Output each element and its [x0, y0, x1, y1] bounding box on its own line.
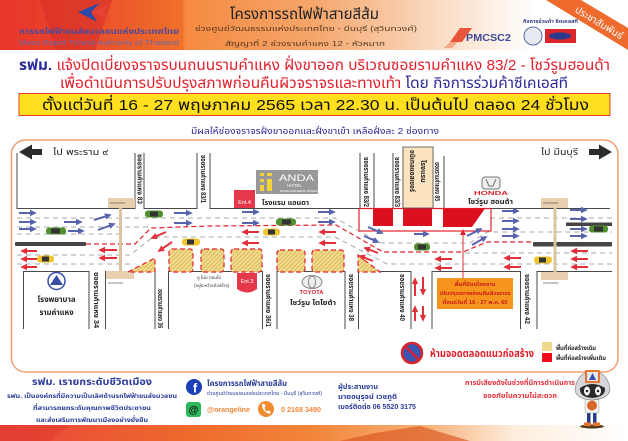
entrance 4: [234, 190, 255, 208]
soi labels south: ซอยรามคำแหง 36/1: [264, 274, 272, 327]
project title: [195, 6, 417, 48]
ANDA hotel logo: [256, 170, 322, 194]
traffic arrows inbound: [22, 232, 588, 268]
hospital: โรงพยาบาล: [38, 295, 76, 304]
callout: closure area: [437, 229, 513, 309]
soi labels south: ซอยรามคำแหง 38: [347, 274, 355, 321]
legend: [542, 342, 606, 362]
soi labels north: ซอยรามคำแหง 83: [136, 154, 144, 204]
ribbon: [546, 0, 628, 50]
MRTA slogan: ที่สามารถยกระดับคุณภาพชีวิตประชาชน: [33, 403, 151, 413]
coordinator: นายอนุรุจน์ เวชภูติ: [338, 393, 397, 402]
MRTA slogan: รฟม. เรายกระดับชีวิตเมือง: [32, 376, 152, 388]
side street arrows: [415, 277, 423, 321]
condo label: ยู โน่ย คอนโด: [197, 274, 221, 281]
coordinator: เบอร์ติดต่อ 06 5520 3175: [338, 403, 416, 411]
building: Ramkhamhaeng lot: [403, 147, 433, 208]
facebook page text: โครงการรถไฟฟ้าสายสีส้ม: [207, 378, 287, 388]
soi labels south: ซอยรามคำแหง 42: [523, 274, 531, 324]
footbridge west: [106, 198, 135, 285]
soi labels south: ซอยรามคำแหง 34: [92, 272, 100, 328]
phone number: 0 2168 3490: [281, 405, 321, 414]
ANDA hotel logo: ANDA: [279, 173, 315, 184]
building: Ramkhamhaeng lot: โรงแรม: [419, 160, 427, 183]
project title: ช่วงศูนย์วัฒนธรรมแห่งประเทศไทย - มีนบุรี (สุวินทวงศ์): [195, 24, 417, 34]
hospital: [38, 272, 76, 317]
PMCSC2 logo: PMCSC2: [466, 33, 511, 44]
ANDA hotel logo: RAMKHAMHAENG BANGKOK: [280, 189, 322, 193]
MRTA name: [19, 25, 179, 47]
joint venture logos: กิจการร่วมค้า ซิดเคลสที: [523, 17, 578, 25]
soi labels south: ซอยรามคำแหง 40: [398, 274, 406, 321]
Honda showroom: [468, 177, 513, 206]
MRTA slogan: [7, 376, 177, 424]
legend: พื้นที่ก่อสร้างเพิ่มเติม: [556, 353, 606, 362]
date banner: [19, 94, 610, 116]
coordinator: [338, 383, 416, 411]
MRTA slogan: รฟม. เป็นองค์กรที่มีความเป็นเลิศด้านรถไฟฟ้าขนส่งมวลชน: [7, 391, 177, 400]
icon: no parking: [402, 343, 422, 363]
direction: to Min Buri: ไป มีนบุรี: [540, 147, 579, 157]
apology note: ขออภัยในความไม่สะดวก: [483, 392, 557, 400]
soi labels south: ซอยรามคำแหง 36: [156, 289, 164, 328]
no parking text: ห้ามจอดตลอดแนวก่อสร้าง: [430, 347, 534, 360]
soi labels south: [92, 272, 531, 328]
footbridge west: สะพานลอย: [108, 281, 123, 285]
footbridge east: สะพานลอย: [543, 281, 558, 285]
north side blocks: [17, 147, 610, 208]
lane dashes: [17, 218, 612, 264]
announcement headline: [19, 54, 610, 92]
Toyota showroom: โชว์รูม โตโยต้า: [290, 299, 336, 307]
project title: สัญญาที่ 2 ช่วงรามคำแหง 12 - หัวหมาก: [225, 38, 385, 48]
soi labels north: ซอยรามคำแหง 83/3: [393, 157, 401, 207]
cars: [37, 210, 608, 264]
joint venture logos: [523, 17, 578, 45]
icon: phone: [258, 401, 274, 417]
MRTA name: การรถไฟฟ้าขนส่งมวลชนแห่งประเทศไทย: [19, 25, 179, 36]
project title: โครงการรถไฟฟ้าสายสีส้ม: [230, 6, 379, 23]
ribbon: ประชาสัมพันธ์: [573, 4, 625, 42]
condo label: (อยู่ระหว่างก่อสร้าง): [194, 282, 230, 289]
direction: to Rama 9: [19, 144, 109, 160]
south side blocks: [24, 272, 612, 329]
callout: closure area: ปรับปรุงสภาพก่อนคืนผิวจราจร: [440, 289, 511, 297]
Toyota showroom: TOYOTA: [300, 290, 324, 296]
callout: closure area: ตั้งแต่วันที่ 16 - 27 พ.ค. 65: [442, 298, 508, 306]
entrance 4: Ent.4: [238, 200, 251, 206]
direction: to Min Buri: [540, 144, 612, 160]
hotel label: โรงแรม แอนดา: [262, 199, 309, 207]
PMCSC2 logo: [444, 28, 511, 48]
MRTA logo: [78, 3, 110, 22]
soi labels north: ซอยรามคำแหง 83/2: [362, 157, 370, 207]
footbridge west: สะพานลอย: [110, 201, 125, 205]
panel: traffic map: [12, 140, 618, 372]
soi labels north: [136, 154, 441, 207]
hospital: รามคำแหง: [40, 308, 74, 317]
header band: [0, 0, 628, 50]
existing construction zones: [128, 249, 380, 272]
apology note: [465, 377, 575, 400]
MRTA slogan: และส่งเสริมการพัฒนาเมืองอย่างยั่งยืน: [36, 415, 148, 424]
traffic arrows outbound: [19, 210, 586, 245]
condo label: [194, 274, 230, 289]
icon: line: [186, 402, 201, 417]
median construction line: [15, 222, 612, 252]
MRTA name: Mass Rapid Transit Authority of Thailand: [19, 40, 179, 47]
line handle: @orangeline: [207, 405, 250, 414]
legend: พื้นที่ก่อสร้างเดิม: [556, 343, 596, 352]
Toyota showroom: [290, 276, 336, 307]
building: Ramkhamhaeng lot: อนิเทลแอสเซอร์: [408, 150, 416, 192]
soi labels north: ซอยรามคำแหง 85: [433, 162, 441, 201]
footer band: [0, 425, 628, 441]
Honda showroom: โชว์รูม ฮอนด้า: [468, 198, 513, 206]
facebook page text: [207, 378, 322, 397]
footbridge east: สะพานลอย: [543, 201, 558, 205]
soi labels north: ซอยรามคำแหง 83/1: [199, 155, 207, 203]
effect note: มีผลให้ช่องจราจรฝั่งขาออกและฝั่งขาเข้า เหลือฝั่งละ 2 ช่องทาง: [191, 125, 440, 136]
mascot: [575, 370, 610, 428]
facebook page text: ช่วงศูนย์วัฒนธรรมแห่งประเทศไทย - มีนบุรี (สุวินทวงศ์): [207, 390, 322, 397]
entrance 3: [237, 273, 257, 292]
icon: facebook: [186, 379, 202, 396]
ANDA hotel logo: HOTEL: [287, 183, 303, 188]
callout: closure area: พื้นที่ปิดเบี่ยงงาน: [454, 280, 496, 288]
footbridge east: [541, 198, 568, 285]
date banner: ตั้งแต่วันที่ 16 - 27 พฤษภาคม 2565 เวลา 22.30 น. เป็นต้นไป ตลอด 24 ชั่วโมง: [42, 94, 589, 114]
announcement headline: รฟม. แจ้งปิดเบี่ยงจราจรบนถนนรามคำแหง ฝั่งขาออก บริเวณซอยรามคำแหง 83/2 - โชว์รูมฮอนด้า: [19, 54, 610, 74]
coordinator: ผู้ประสานงาน: [338, 383, 378, 391]
entrance 3: Ent.3: [241, 279, 253, 285]
apology note: การมีเสียงดังในช่วงที่มีการดำเนินการ: [465, 377, 575, 387]
direction: to Rama 9: ไป พระราม ๙: [52, 147, 109, 157]
icon: line: @: [189, 405, 199, 416]
icon: facebook: f: [193, 380, 198, 396]
announcement headline: เพื่อดำเนินการปรับปรุงสภาพก่อนคืนผิวจราจรและทางเท้า โดย กิจการร่วมค้าซีเคเอสที: [60, 72, 568, 92]
added construction zones: [359, 208, 491, 231]
Honda showroom: HONDA: [474, 191, 509, 197]
